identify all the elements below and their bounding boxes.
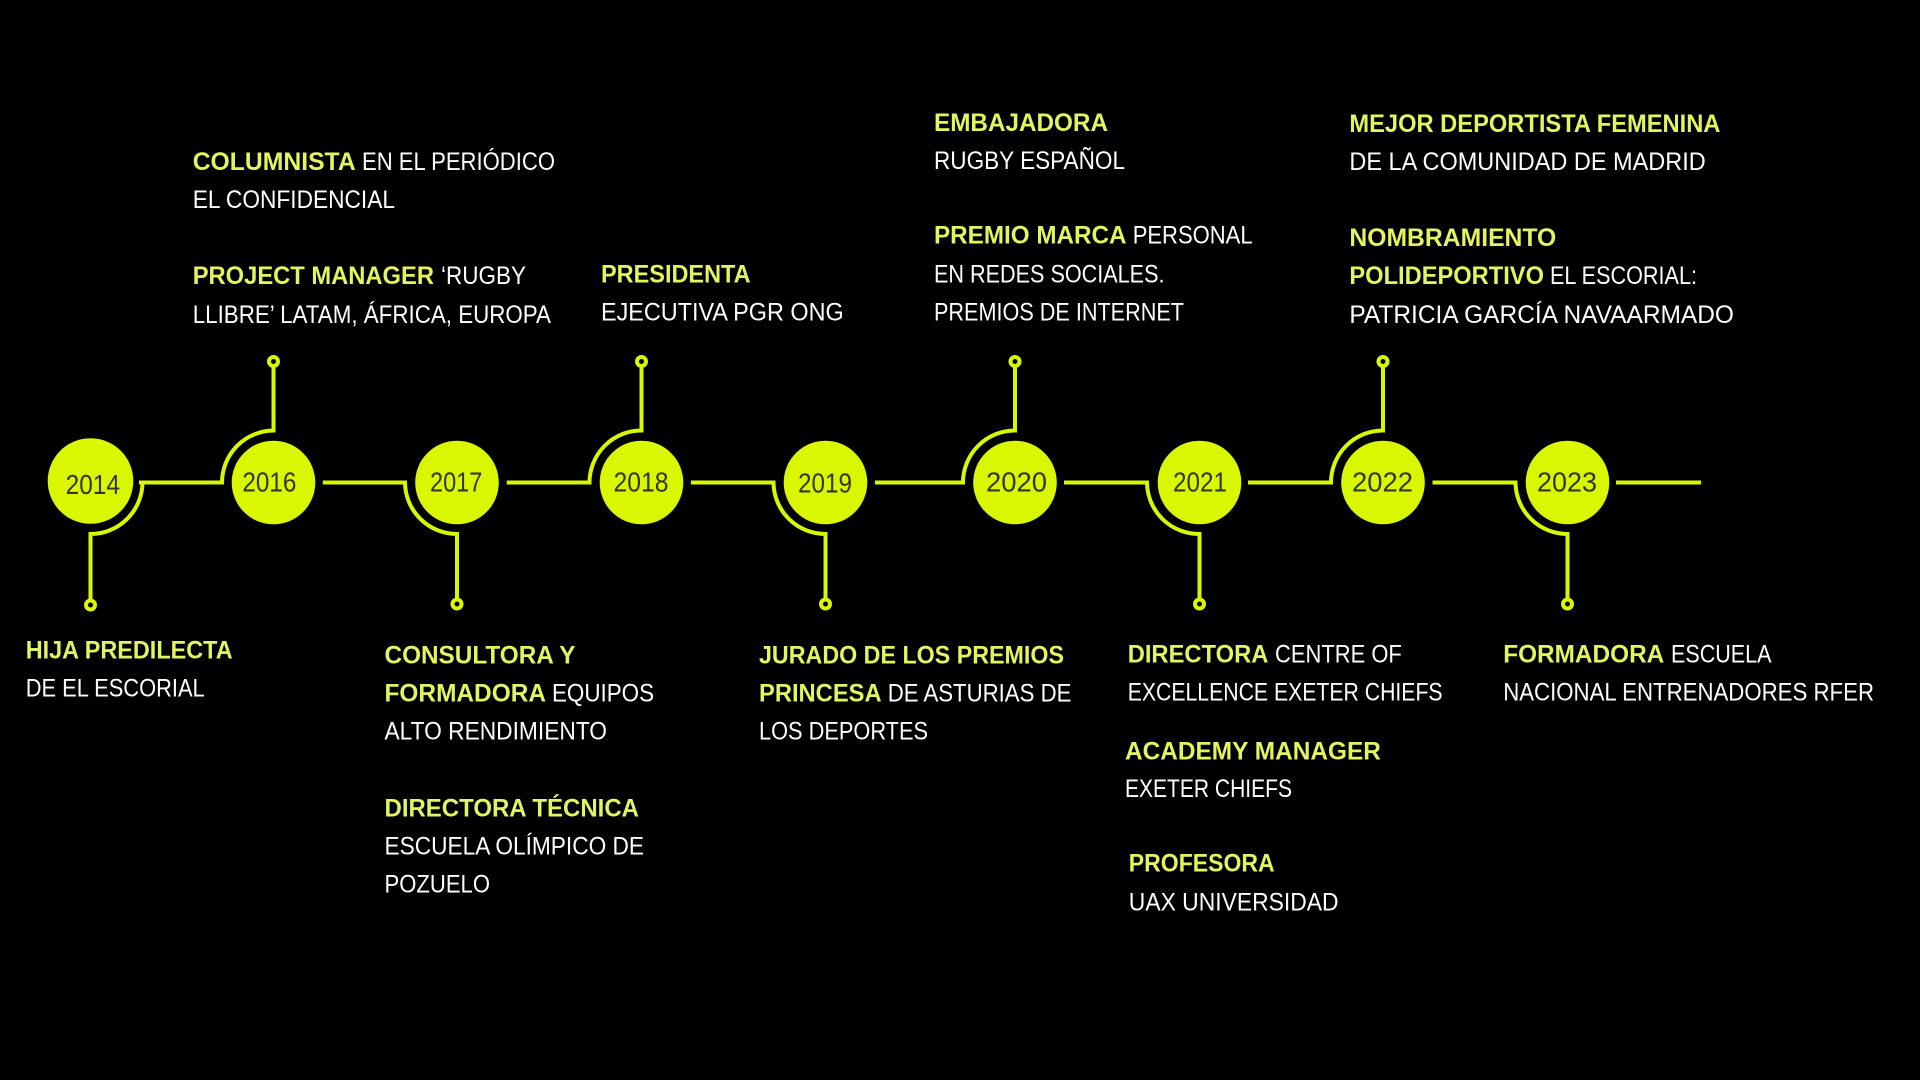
text: 2022 mejor deportista: MEJOR DEPORTISTA FEMENINA (1349, 110, 1720, 138)
text: 2017 consultora y formadora: FORMADORA (384, 679, 546, 707)
node 2018 (600, 441, 683, 524)
text: 2016 project manager (193, 262, 551, 329)
text: 2021 academy manager: ACADEMY MANAGER (1125, 737, 1381, 765)
text: 2022 mejor deportista: DE LA COMUNIDAD DE MADRID (1349, 148, 1706, 176)
node 2022 (1341, 441, 1425, 524)
connector 2014 to 2016 (139, 357, 278, 482)
node 2017 (415, 441, 499, 524)
text: 2019 jurado (759, 642, 1071, 745)
connector 2017 to 2018 (507, 357, 646, 482)
node 2014: 2014 (66, 469, 120, 500)
text: 2021 directora: EXCELLENCE EXETER CHIEFS (1128, 679, 1443, 707)
text: 2016 columnista: COLUMNISTA (193, 148, 356, 176)
text: 2021 profesora: UAX UNIVERSIDAD (1129, 889, 1338, 917)
connector 2018 to 2019 (691, 482, 830, 608)
text: 2020 embajadora (934, 109, 1125, 175)
node 2020 (973, 441, 1057, 524)
text: 2016 columnista: EN EL PERIÓDICO (362, 147, 555, 176)
node 2022: 2022 (1352, 466, 1413, 498)
connector 2022 to 2023 (1432, 482, 1572, 608)
text: 2021 directora: CENTRE OF (1275, 641, 1402, 669)
text: 2021 academy manager: EXETER CHIEFS (1125, 775, 1292, 803)
node 2023: 2023 (1537, 466, 1597, 498)
text: 2017 consultora y formadora (384, 642, 654, 745)
text: 2016 project manager: LLIBRE’ LATAM, ÁFRICA, EUROPA (193, 300, 551, 329)
text: 2022 nombramiento: PATRICIA GARCÍA NAVAARMADO (1349, 300, 1734, 329)
text: 2018 presidenta: PRESIDENTA (601, 261, 751, 289)
text: 2014 hija predilecta: DE EL ESCORIAL (26, 675, 205, 703)
text: 2021 profesora: PROFESORA (1129, 850, 1275, 878)
text: 2019 jurado: JURADO DE LOS PREMIOS (759, 642, 1064, 670)
text: 2021 directora (1128, 641, 1443, 707)
text: 2017 directora tecnica (384, 794, 644, 898)
text: 2020 premio marca: EN REDES SOCIALES. (934, 261, 1164, 289)
text: 2022 nombramiento: NOMBRAMIENTO (1349, 224, 1556, 252)
text: 2016 project manager: ‘RUGBY (441, 262, 526, 290)
node 2014 (48, 438, 143, 610)
node 2016 (232, 441, 315, 524)
node 2018: 2018 (614, 466, 668, 498)
text: 2023 formadora: NACIONAL ENTRENADORES RFER (1503, 679, 1874, 707)
node 2019 (784, 441, 867, 524)
text: 2020 premio marca: PERSONAL (1133, 222, 1253, 250)
text: 2023 formadora: FORMADORA (1503, 641, 1664, 669)
text: 2014 hija predilecta (26, 637, 233, 703)
text: 2017 directora tecnica: ESCUELA OLÍMPICO DE (384, 832, 644, 860)
connector 2020 to 2021 (1064, 482, 1204, 608)
text: 2019 jurado: DE ASTURIAS DE (888, 679, 1071, 707)
text: 2020 embajadora: RUGBY ESPAÑOL (934, 146, 1125, 175)
node 2017: 2017 (430, 466, 482, 498)
text: 2021 directora: DIRECTORA (1128, 641, 1268, 669)
text: 2017 directora tecnica: POZUELO (384, 870, 490, 898)
connector 2019 to 2020 (875, 357, 1020, 482)
text: 2018 presidenta (601, 261, 844, 327)
text: 2018 presidenta: EJECUTIVA PGR ONG (601, 299, 844, 327)
node 2023 (1526, 441, 1609, 524)
text: 2017 consultora y formadora: EQUIPOS (552, 679, 654, 707)
text: 2014 hija predilecta: HIJA PREDILECTA (26, 637, 233, 665)
text: 2022 mejor deportista (1349, 110, 1720, 176)
text: 2020 premio marca (934, 222, 1253, 327)
node 2019: 2019 (798, 468, 852, 498)
text: 2020 embajadora: EMBAJADORA (934, 109, 1108, 137)
text: 2023 formadora (1503, 641, 1874, 707)
text: 2022 nombramiento: EL ESCORIAL: (1550, 262, 1697, 290)
tail line (1616, 480, 1701, 484)
node 2021: 2021 (1173, 466, 1227, 498)
text: 2021 academy manager (1125, 737, 1381, 803)
text: 2022 nombramiento: POLIDEPORTIVO (1349, 262, 1544, 290)
text: 2016 columnista (193, 147, 555, 214)
text: 2020 premio marca: PREMIOS DE INTERNET (934, 299, 1184, 327)
text: 2021 profesora (1129, 850, 1338, 917)
text: 2023 formadora: ESCUELA (1671, 641, 1772, 669)
text: 2019 jurado: PRINCESA (759, 679, 882, 707)
node 2021 (1158, 441, 1241, 524)
text: 2019 jurado: LOS DEPORTES (759, 717, 928, 745)
text: 2020 premio marca: PREMIO MARCA (934, 222, 1126, 250)
node 2020: 2020 (986, 466, 1047, 498)
text: 2017 consultora y formadora: CONSULTORA Y (384, 642, 576, 670)
connector 2021 to 2022 (1248, 357, 1388, 482)
node 2016: 2016 (242, 466, 296, 498)
text: 2016 project manager: PROJECT MANAGER (193, 262, 434, 290)
connector 2016 to 2017 (323, 482, 462, 608)
text: 2017 directora tecnica: DIRECTORA TÉCNICA (384, 794, 639, 823)
text: 2022 nombramiento (1349, 224, 1734, 329)
text: 2017 consultora y formadora: ALTO RENDIMIENTO (384, 717, 607, 745)
text: 2016 columnista: EL CONFIDENCIAL (193, 186, 395, 214)
